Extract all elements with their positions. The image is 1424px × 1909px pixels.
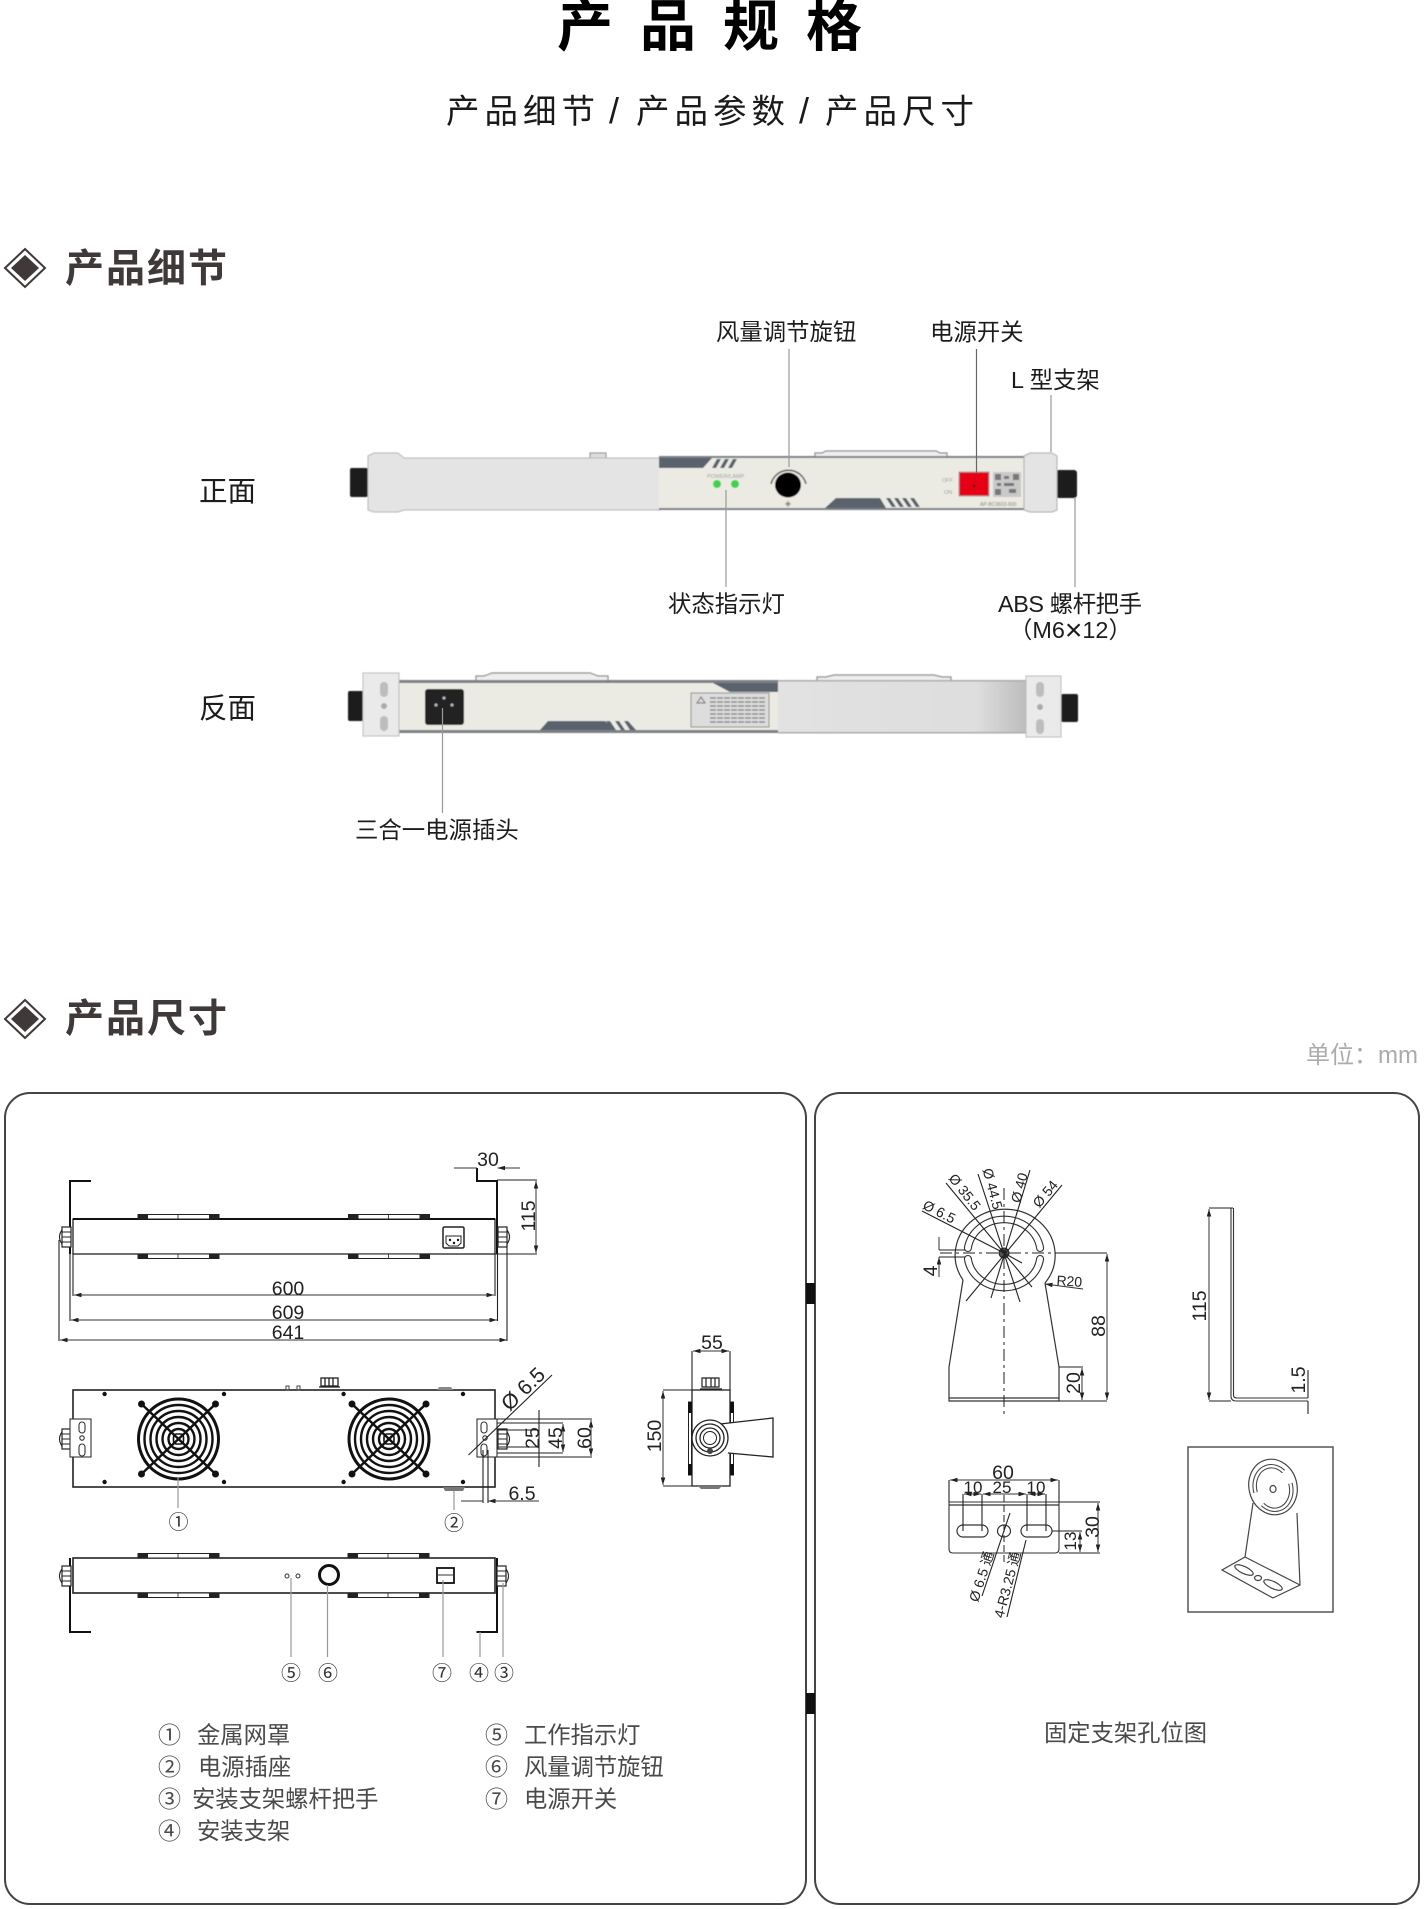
drawing: fan view: 45: [545, 1427, 567, 1449]
plug: [443, 1227, 464, 1248]
airflow knob: [771, 470, 806, 484]
drawing: bracket front: 20: [1063, 1372, 1085, 1394]
drawing: bracket front: 4: [920, 1265, 942, 1276]
drawing: fan view: 25: [522, 1427, 544, 1449]
leader: ABS knob: （M6: [1009, 617, 1065, 643]
callouts 3 to 7: ⑤: [281, 1662, 301, 1685]
drawing: bracket front: Ø 40: [1008, 1171, 1031, 1204]
legend: parts right: [485, 1722, 664, 1812]
knobs: [348, 691, 365, 721]
top knob: [700, 1378, 722, 1389]
callouts 3 to 7: [281, 1578, 514, 1685]
drawing: bracket front: R20: [1056, 1272, 1083, 1290]
drawing: bracket foot plan: Ø 6.5 通: [966, 1549, 997, 1604]
drawing: fan view: Ø 6.5: [497, 1363, 550, 1415]
panel: main unit drawings: [5, 1093, 806, 1904]
drawing: bracket foot plan: 25: [993, 1478, 1011, 1497]
bracket: [720, 1418, 773, 1457]
dimensions: [939, 1250, 1107, 1401]
dimensions: [663, 1351, 730, 1486]
drawing: bracket side: [1189, 1208, 1310, 1414]
knobs: [60, 1227, 510, 1247]
subtitle: /: [609, 90, 624, 131]
drawing: bracket front: [920, 1166, 1110, 1414]
brackets: [70, 1181, 91, 1254]
handles: [138, 1554, 429, 1598]
right knob: [1056, 470, 1077, 498]
drawing: fan view: 60: [574, 1427, 596, 1449]
callout 1: [168, 1478, 188, 1534]
centre lines: [940, 1188, 1055, 1414]
product photo: front: AP-BC0603-600: [980, 502, 1017, 508]
drawing: fan view: 6.5: [508, 1483, 536, 1505]
body: [399, 682, 778, 732]
drawing: bracket front: Ø 44.5: [980, 1166, 1006, 1211]
left bracket: [363, 673, 399, 736]
handles: [688, 1402, 734, 1475]
left knob: [350, 468, 368, 497]
legend: parts left: ②: [158, 1754, 181, 1780]
right bracket: [1024, 453, 1057, 512]
leader: ABS knob: 12）: [1082, 617, 1132, 643]
subtitle: 产品尺寸: [825, 94, 979, 131]
legend: parts right: ⑤: [485, 1722, 508, 1748]
centre hole: [999, 1248, 1009, 1258]
legend: parts right: ⑦: [485, 1786, 508, 1812]
drawing: side view: [644, 1332, 773, 1489]
drawing: bracket foot plan: 13: [1061, 1532, 1080, 1550]
drawing: bracket front: Ø 6.5: [920, 1197, 958, 1227]
drawing: bracket foot plan: 4-R3.25 通: [991, 1550, 1024, 1619]
legend: parts right: 工作指示灯: [524, 1722, 640, 1748]
leader: airflow knob: 风量调节旋钮: [716, 319, 856, 345]
legend: parts right: 风量调节旋钮: [524, 1754, 664, 1780]
bottom bump: [698, 1486, 722, 1489]
subtitle: [446, 90, 979, 131]
switch: [437, 1568, 454, 1583]
caption: bracket hole drawing: 固定支架孔位图: [1044, 1720, 1207, 1746]
drawing: bracket front: Ø 54: [1029, 1177, 1061, 1211]
knobs: [60, 1566, 508, 1586]
subtitle: /: [799, 90, 814, 131]
drawing: bracket foot plan: 10: [1027, 1478, 1045, 1497]
lights: [285, 1574, 289, 1578]
right bracket: [1026, 676, 1061, 737]
callouts 3 to 7: ④: [469, 1662, 489, 1685]
handles: [476, 673, 608, 682]
subtitle: 产品参数: [636, 94, 790, 131]
handles: [138, 1214, 430, 1258]
legend: parts left: ③: [158, 1786, 181, 1812]
panel: bracket drawings: [815, 1093, 1419, 1904]
right bracket tab: [477, 1419, 510, 1457]
knob: [320, 1566, 338, 1584]
control panel: [659, 457, 1025, 510]
legend: parts right: 电源开关: [524, 1786, 617, 1812]
callouts 3 to 7: ⑥: [318, 1662, 338, 1685]
arc slots: [964, 1216, 1044, 1291]
leader: status light: [668, 490, 785, 617]
section heading: product dimensions: 产品尺寸: [65, 998, 229, 1041]
dimension lines: [59, 1180, 537, 1341]
graphic stripes: [713, 683, 778, 692]
product photo: front: ◈: [785, 499, 792, 508]
handle top: [815, 451, 947, 458]
leader: power plug: 三合一电源插头: [355, 817, 519, 843]
leader: ABS knob: ABS 螺杆把手: [998, 591, 1142, 617]
drawing: top view: 609: [272, 1302, 304, 1324]
power plug: [425, 689, 464, 725]
left bracket and body: [368, 453, 660, 512]
leader: status light: 状态指示灯: [668, 591, 785, 617]
drawing: side view: 150: [644, 1420, 666, 1452]
legend: parts left: [158, 1722, 378, 1844]
dimensions: 30: [477, 1149, 499, 1171]
drawing: fan view: [60, 1363, 596, 1505]
product photo: front: ON: [944, 490, 952, 496]
top knob and bumps: [286, 1378, 465, 1491]
dimensions: [949, 1480, 1100, 1553]
callout 2: ②: [444, 1512, 464, 1535]
drawing: front view: [60, 1554, 508, 1632]
drawing: top view: [59, 1149, 540, 1344]
dimensions: [468, 1375, 592, 1503]
leader: L bracket: L 型支架: [1011, 367, 1100, 393]
legend: parts right: ⑥: [485, 1754, 508, 1780]
rating label: [691, 693, 769, 727]
drawing: bracket side: 1.5: [1288, 1366, 1310, 1394]
label: front: 正面: [199, 476, 256, 508]
drawing: top view: 641: [272, 1322, 304, 1344]
drawing: bracket front: Ø 35.5: [946, 1170, 984, 1214]
drawing: bracket side: 115: [1189, 1290, 1211, 1322]
legend: parts left: ①: [158, 1722, 181, 1748]
legend: parts left: 安装支架螺杆把手: [192, 1786, 378, 1812]
drawing: bracket foot plan: 10: [964, 1478, 982, 1497]
slots and hole: [957, 1525, 988, 1537]
left bracket tab: [60, 1419, 91, 1457]
legend: parts left: 电源插座: [198, 1754, 291, 1780]
subtitle: 产品细节: [446, 94, 600, 131]
drawing: bracket foot plan: 30: [1082, 1516, 1104, 1538]
legend: parts left: ④: [158, 1818, 181, 1844]
drawing: top view: 600: [272, 1278, 304, 1300]
status lights: POWER/LAMP: [707, 474, 745, 480]
drawing: side view: 55: [701, 1332, 723, 1354]
leader: L bracket: [1011, 367, 1100, 452]
product photo: back: [348, 673, 1078, 737]
label: back: 反面: [199, 693, 256, 725]
drawing: top view: 115: [518, 1200, 540, 1232]
connector mark lower: [806, 1693, 815, 1714]
leader: ABS knob: [998, 497, 1142, 647]
callout 1: ①: [168, 1511, 188, 1534]
graphic stripes: [659, 458, 712, 468]
screws: [102, 1392, 465, 1484]
product photo: front: [350, 451, 1077, 512]
drawing: bracket foot plan: [949, 1462, 1104, 1619]
radial leaders: [922, 1170, 1062, 1302]
callouts 3 to 7: ③: [494, 1662, 514, 1685]
drawing: isometric bracket: [1188, 1447, 1333, 1612]
unit note: 单位：mm: [1306, 1042, 1418, 1069]
QR code: [993, 472, 1021, 497]
drawing: bracket front: 88: [1088, 1315, 1110, 1337]
connector mark upper: [806, 1283, 815, 1304]
callout 2: [444, 1491, 464, 1535]
brackets: [70, 1558, 91, 1632]
drawing: bracket foot plan: 60: [992, 1462, 1014, 1484]
legend: parts left: 金属网罩: [197, 1722, 290, 1748]
section heading: product details: 产品细节: [65, 248, 229, 291]
leader: power switch: 电源开关: [930, 319, 1024, 345]
leader: ABS knob: ×: [1065, 614, 1082, 647]
legend: parts left: 安装支架: [197, 1818, 290, 1844]
callouts 3 to 7: ⑦: [432, 1662, 452, 1685]
power switch: OFF: [942, 478, 954, 484]
fans: [138, 1399, 219, 1479]
